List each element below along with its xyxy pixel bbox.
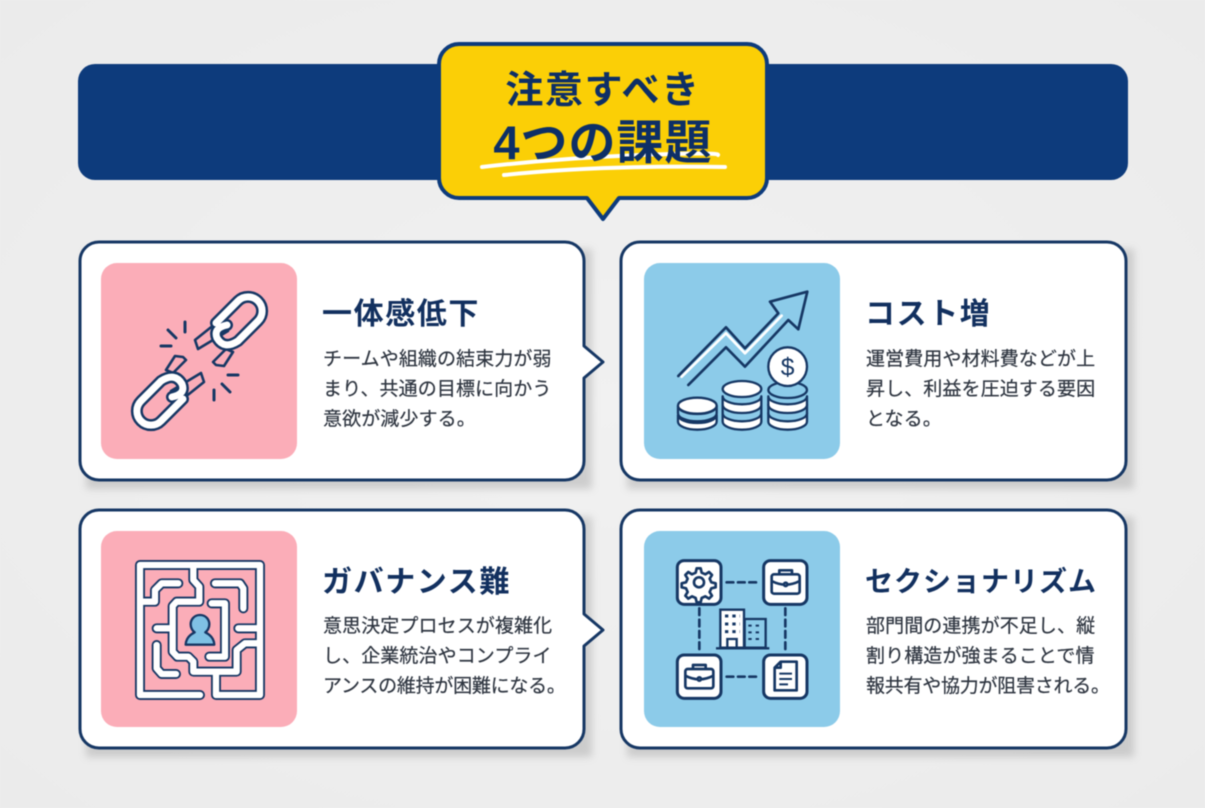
description: [323, 348, 552, 430]
description: 昇し、利益を圧迫する要因: [866, 378, 1095, 400]
card shadow: [627, 517, 1134, 757]
heading: ガバナンス難: [322, 566, 511, 599]
icon tile pink: [101, 263, 297, 459]
description: 割り構造が強まることで情: [866, 645, 1095, 667]
dollar coin: [768, 347, 807, 386]
heading: 一体感低下: [322, 298, 480, 331]
panel: ガバナンス難: [80, 510, 603, 757]
description: 意欲が減少する。: [323, 408, 476, 430]
description: アンスの維持が困難になる。: [323, 675, 566, 697]
title badge: [439, 44, 767, 219]
office building: [716, 610, 769, 648]
heading: セクショナリズム: [865, 565, 1097, 597]
coin stack middle: [723, 381, 761, 430]
description: し、企業統治やコンプライ: [323, 645, 552, 667]
description: 意思決定プロセスが複雑化: [323, 615, 552, 637]
card shadow: [627, 249, 1134, 489]
description: [866, 615, 1110, 697]
card shadow: [86, 517, 592, 757]
document: [775, 662, 797, 690]
badge speech bubble: [439, 44, 767, 219]
description: 報共有や協力が阻害される。: [866, 675, 1110, 697]
description: まり、共通の目標に向かう: [323, 378, 551, 400]
icon: maze with person: [140, 565, 260, 695]
briefcase bottom left: [685, 665, 713, 688]
card body: [621, 242, 1126, 480]
heading: コスト増: [865, 298, 991, 331]
description: となる。: [866, 409, 942, 430]
coin stack short: [678, 398, 717, 430]
icon tile blue: [644, 531, 840, 727]
gear: [682, 568, 716, 602]
briefcase top right: [772, 570, 800, 594]
panel: セクショナリズム: [621, 510, 1134, 757]
card shadow: [86, 249, 592, 489]
title line 1: 注意すべき: [505, 70, 701, 112]
icon: broken chain: [137, 297, 262, 425]
description: チームや組織の結束力が弱: [323, 348, 552, 370]
white underline strokes: [482, 154, 725, 175]
person: [186, 615, 214, 645]
icon: rising costs: [678, 292, 807, 430]
description: 運営費用や材料費などが上: [866, 348, 1095, 370]
icon: siloed departments: [677, 561, 807, 698]
department boxes: [677, 561, 807, 698]
description: [323, 615, 566, 697]
description: [866, 348, 1095, 430]
card body: [621, 510, 1126, 748]
panel: コスト増: [621, 242, 1134, 489]
panel: 一体感低下: [80, 242, 603, 489]
title line 2: 4つの課題: [493, 116, 713, 169]
coin stack tall: [768, 382, 807, 430]
icon tile pink: [101, 531, 297, 727]
card body with arrow: [80, 242, 603, 480]
icon tile blue: [644, 263, 840, 459]
dashed connectors: [699, 582, 785, 677]
icon: rising costs: $: [781, 354, 795, 381]
description: 部門間の連携が不足し、縦: [866, 615, 1095, 637]
header banner: [78, 64, 1128, 180]
card body with arrow: [80, 510, 603, 748]
